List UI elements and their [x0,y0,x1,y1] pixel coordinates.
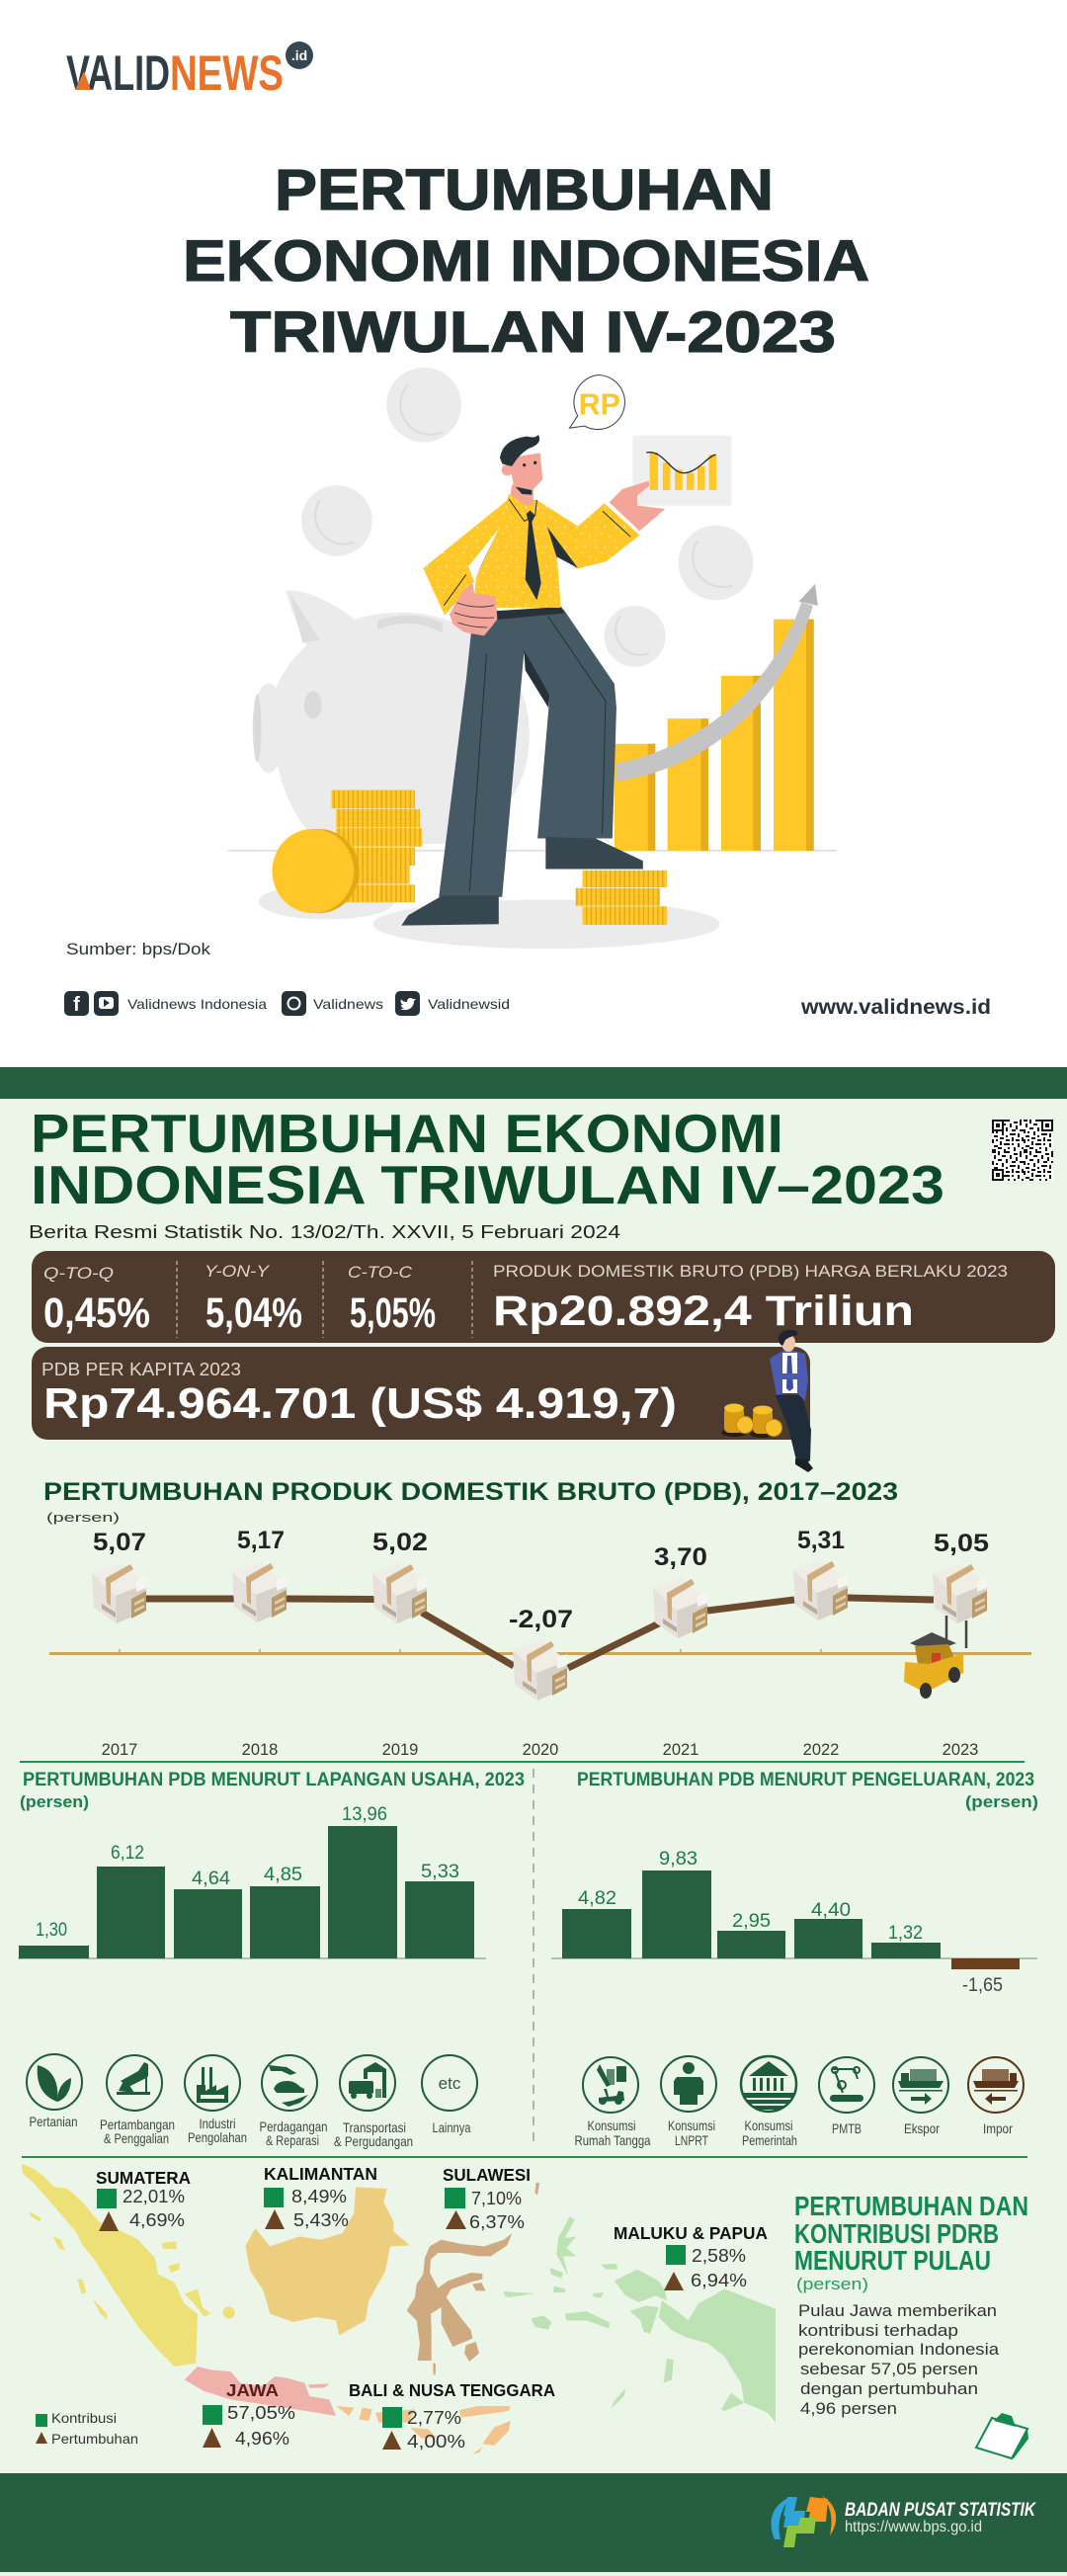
bar chart: business sectors [18,1803,486,1958]
panel: PDB per kapita: Rp74.964.701 (US$ 4.919,7) [43,1379,677,1428]
text block: regional summary: Pulau Jawa memberikan [798,2301,997,2320]
icon: Impor [968,2057,1024,2113]
logo: BPS [772,2496,836,2547]
icon labels: Rumah Tangga [575,2132,651,2148]
heading: regional contribution: MENURUT PULAU [794,2245,991,2276]
main heading: PERTUMBUHAN EKONOMI [31,1103,783,1164]
Nusa Tenggara east [410,2406,511,2453]
icon: Ekspor [893,2057,948,2113]
social media row: Validnewsid [428,996,510,1012]
icon: Perdagangan [262,2055,317,2111]
Sumatera [22,2164,235,2367]
icon: Konsumsi Rumah Tangga [583,2057,638,2113]
icon labels: Pertambangan [100,2117,175,2132]
region: Jawa: JAWA [226,2380,279,2400]
region: Maluku and Papua: 2,58% [692,2245,746,2266]
region: Bali and Nusa Tenggara: 2,77% [407,2407,461,2428]
bar chart: business sectors: 6,12 [111,1842,144,1864]
box 2023 [933,1563,987,1623]
heading: regional contribution [794,2191,1028,2276]
data values GDP growth: 5,17 [237,1527,285,1554]
icon labels [30,2114,1013,2149]
logo: validnews: .id [291,47,307,63]
icon: clipboard [976,2413,1028,2458]
bar chart: expenditure: 2,95 [732,1910,771,1932]
QR code [992,1120,1053,1181]
data values GDP growth [93,1527,989,1633]
map: eastern Indonesia [407,2183,776,2453]
source text: Sumber: bps/Dok [66,941,211,958]
panel: PDB per kapita: PDB PER KAPITA 2023 [41,1360,241,1379]
panel: PDB stats: 5,04% [205,1289,302,1337]
bar chart: business sectors: 5,33 [421,1861,459,1882]
axis [49,1649,1031,1654]
region: Sulawesi [443,2165,531,2232]
region: Kalimantan [264,2164,377,2230]
icon labels: & Reparasi [266,2132,319,2148]
box 2022 [793,1560,848,1620]
heading: GDP growth 2017-2023: PERTUMBUHAN PRODUK DOMESTIK BRUTO (PDB), 2017–2023 [43,1478,898,1506]
bar chart: business sectors: 4,64 [192,1868,230,1889]
panel: PDB per kapita [32,1347,810,1440]
icon: businessman leaning [770,1330,813,1472]
icon labels: Transportasi [343,2119,406,2135]
panel: PDB stats: 0,45% [43,1289,150,1337]
title: PERTUMBUHAN [275,158,774,222]
logo: validnews: VALID [66,45,170,101]
main heading: INDONESIA TRIWULAN IV–2023 [31,1154,944,1215]
panel: PDB stats: Rp20.892,4 Triliun [493,1288,914,1335]
title: EKONOMI INDONESIA [183,229,869,293]
white poster background [0,0,1067,1067]
heading: business sectors [20,1769,525,1811]
infographic light background [0,1099,1067,2576]
top green band [0,1067,1067,1099]
speech bubble RP: RP [579,388,620,421]
year labels: 2021 [663,1741,698,1759]
panel: PDB stats: Q-TO-Q [43,1264,114,1283]
icon labels: LNPRT [675,2132,708,2148]
icon labels: Impor [983,2120,1013,2136]
icon labels: Konsumsi [668,2118,715,2133]
data values GDP growth: 5,07 [93,1529,146,1556]
social media row: f [73,994,80,1016]
text block: regional summary: sebesar 57,05 persen [800,2360,978,2378]
text block: regional summary: kontribusi terhadap [798,2321,958,2340]
region: Kalimantan: 5,43% [293,2209,349,2230]
data values GDP growth: 5,02 [372,1529,428,1556]
text block: regional summary: dengan pertumbuhan [800,2379,978,2398]
panel: PDB stats [32,1251,1055,1343]
icon: Industri [185,2055,240,2111]
Jawa [185,2367,336,2416]
bar chart: expenditure: 1,32 [888,1922,923,1944]
box 2021 [653,1578,707,1638]
region: Kalimantan: 8,49% [291,2186,347,2206]
year labels [102,1741,978,1759]
region: Sumatera: 4,69% [129,2209,185,2230]
heading: expenditure: (persen) [965,1793,1038,1811]
bar chart: business sectors: 13,96 [342,1803,387,1825]
line chart: connectors [145,1598,934,1668]
chart card [632,436,731,506]
year labels: 2022 [803,1741,839,1759]
icon labels: Konsumsi [587,2118,636,2133]
bar chart: business sectors: 1,30 [36,1919,67,1941]
region: Bali and Nusa Tenggara: BALI & NUSA TENGGARA [349,2380,555,2400]
data values GDP growth: -2,07 [509,1606,573,1633]
icon labels: Industri [200,2116,235,2131]
bar chart: business sectors: 4,85 [264,1864,302,1885]
region: Bali and Nusa Tenggara: 4,00% [407,2431,465,2451]
year labels: 2020 [523,1741,558,1759]
heading: regional contribution: KONTRIBUSI PDRB [794,2218,999,2249]
Sulawesi [407,2183,539,2374]
region: Jawa [203,2380,295,2449]
heading: business sectors: (persen) [20,1793,89,1811]
icon labels: & Penggalian [104,2130,169,2146]
icon: Transportasi [340,2055,395,2111]
region: Sumatera: 22,01% [123,2186,185,2206]
data values GDP growth: 5,31 [797,1527,845,1554]
bar chart: expenditure: 4,82 [578,1887,616,1909]
box 2018 [232,1562,287,1622]
footer text: https://www.bps.go.id [845,2519,982,2535]
icon: Pertanian [27,2054,82,2110]
region: Sulawesi: SULAWESI [443,2165,531,2185]
region: Sulawesi: 7,10% [471,2188,522,2208]
data values GDP growth: 3,70 [654,1543,707,1571]
region: Bali and Nusa Tenggara [349,2380,555,2451]
icon: Lainnya: etc [439,2074,461,2093]
bar chart: expenditure: 9,83 [659,1848,698,1870]
map legend [36,2410,138,2447]
data values GDP growth: 5,05 [934,1530,989,1557]
box 2017 [92,1563,146,1623]
social media row: Validnews Indonesia [127,996,267,1012]
panel: PDB stats: C-TO-C [348,1263,413,1282]
region: Kalimantan: KALIMANTAN [264,2164,377,2184]
logo: validnews: NEWS [170,45,284,101]
box 2019 [372,1563,427,1623]
panel: PDB stats: 5,05% [350,1289,436,1337]
map legend: Pertumbuhan [51,2431,138,2447]
social media row [64,991,510,1016]
footer band [0,2473,1067,2572]
icon labels: PMTB [832,2120,862,2136]
text block: regional summary: 4,96 persen [800,2399,897,2418]
icon labels: Perdagangan [259,2119,328,2134]
box 2020 [513,1640,567,1701]
bar chart: expenditure [551,1848,1037,1996]
region: Sumatera: SUMATERA [96,2168,191,2188]
panel: PDB stats: Y-ON-Y [205,1262,271,1281]
year labels: 2019 [382,1741,418,1759]
map: western Indonesia [22,2164,410,2416]
main heading [31,1103,944,1215]
businessman upper body [423,435,665,635]
icon labels: Pertanian [30,2114,77,2129]
unit label: (persen) [46,1510,120,1525]
icon labels: Lainnya [433,2119,471,2135]
heading: business sectors: PERTUMBUHAN PDB MENURUT LAPANGAN USAHA, 2023 [23,1769,525,1790]
logo: validnews [66,42,313,101]
Bali and Lombok [336,2406,415,2423]
title [183,158,869,365]
heading: expenditure [577,1769,1038,1811]
region: Maluku and Papua [614,2223,768,2290]
panel: PDB stats: PRODUK DOMESTIK BRUTO (PDB) HARGA BERLAKU 2023 [493,1262,1008,1281]
social media row: Validnews [313,996,383,1012]
icon: PMTB [819,2057,874,2113]
footer text [845,2500,1036,2535]
icon labels: Pengolahan [188,2129,247,2145]
Kalimantan [245,2187,410,2335]
icon labels: Pemerintah [742,2132,797,2148]
bar chart: expenditure: -1,65 [962,1974,1003,1996]
speech bubble RP [569,374,624,430]
icon: Konsumsi LNPRT [661,2056,716,2112]
region: Jawa: 57,05% [227,2402,295,2423]
region: Sumatera [96,2168,191,2231]
icon: Konsumsi Pemerintah [741,2056,796,2112]
year labels: 2017 [102,1741,137,1759]
icon: forklift [904,1616,966,1699]
subtitle: Berita Resmi Statistik No. 13/02/Th. XXVII, 5 Februari 2024 [29,1221,620,1242]
Maluku and Papua [504,2216,776,2423]
icon: Pertambangan [107,2055,162,2111]
text block: regional summary: perekonomian Indonesia [798,2340,1000,2359]
map legend: Kontribusi [51,2410,117,2426]
website url: www.validnews.id [800,996,991,1019]
year labels: 2018 [242,1741,278,1759]
bar chart: expenditure: 4,40 [811,1899,851,1921]
text block: regional summary [798,2301,1000,2418]
icon: gold coins [721,1403,782,1438]
icon labels: Konsumsi [745,2118,792,2133]
title: TRIWULAN IV-2023 [230,300,836,365]
region: Maluku and Papua: MALUKU & PAPUA [614,2223,768,2243]
unit label regional: (persen) [796,2275,868,2293]
illustration: piggy bank, coins and growth chart [228,368,837,949]
region: Jawa: 4,96% [235,2428,289,2449]
region: Maluku and Papua: 6,94% [691,2270,747,2290]
icon labels: Ekspor [904,2120,940,2136]
region: Sulawesi: 6,37% [469,2211,525,2232]
icon: Lainnya [422,2055,477,2111]
trousers and shoes [401,609,643,926]
year labels: 2023 [943,1741,978,1759]
icon labels: & Pergudangan [334,2133,413,2149]
